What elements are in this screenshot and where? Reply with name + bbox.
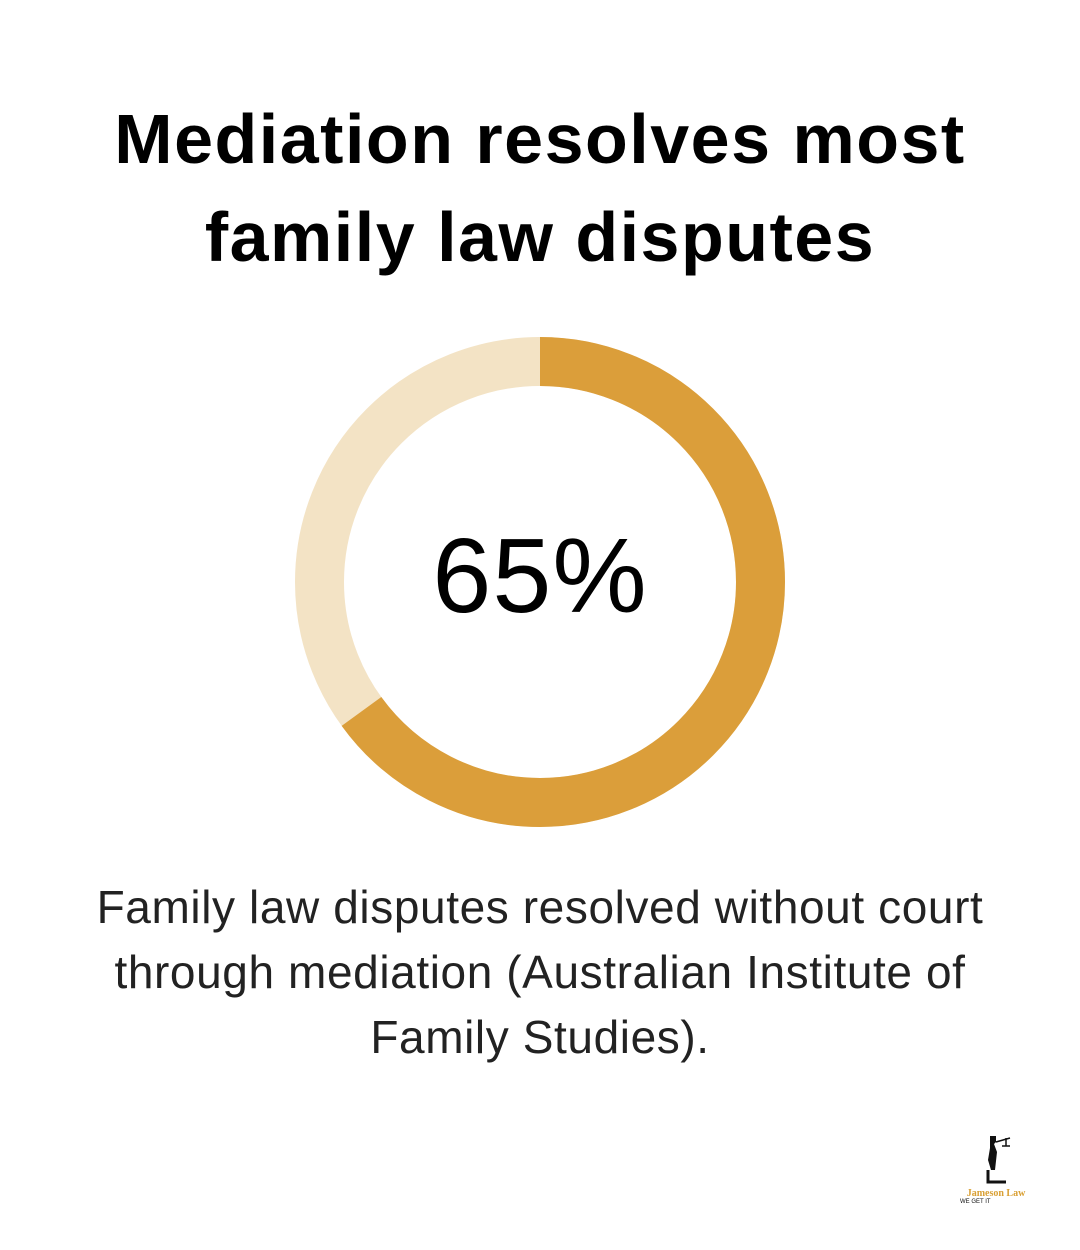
caption: Family law disputes resolved without court through mediation (Australian Institute of Family Studies).: [97, 881, 983, 1063]
title: family law disputes: [205, 198, 875, 276]
title: [114, 100, 966, 276]
percentage value: 65%: [432, 517, 648, 635]
logo: [960, 1136, 1026, 1205]
title: Mediation resolves most: [114, 100, 966, 178]
logo: Jameson Law: [967, 1188, 1025, 1199]
logo: WE GET IT: [960, 1199, 991, 1205]
